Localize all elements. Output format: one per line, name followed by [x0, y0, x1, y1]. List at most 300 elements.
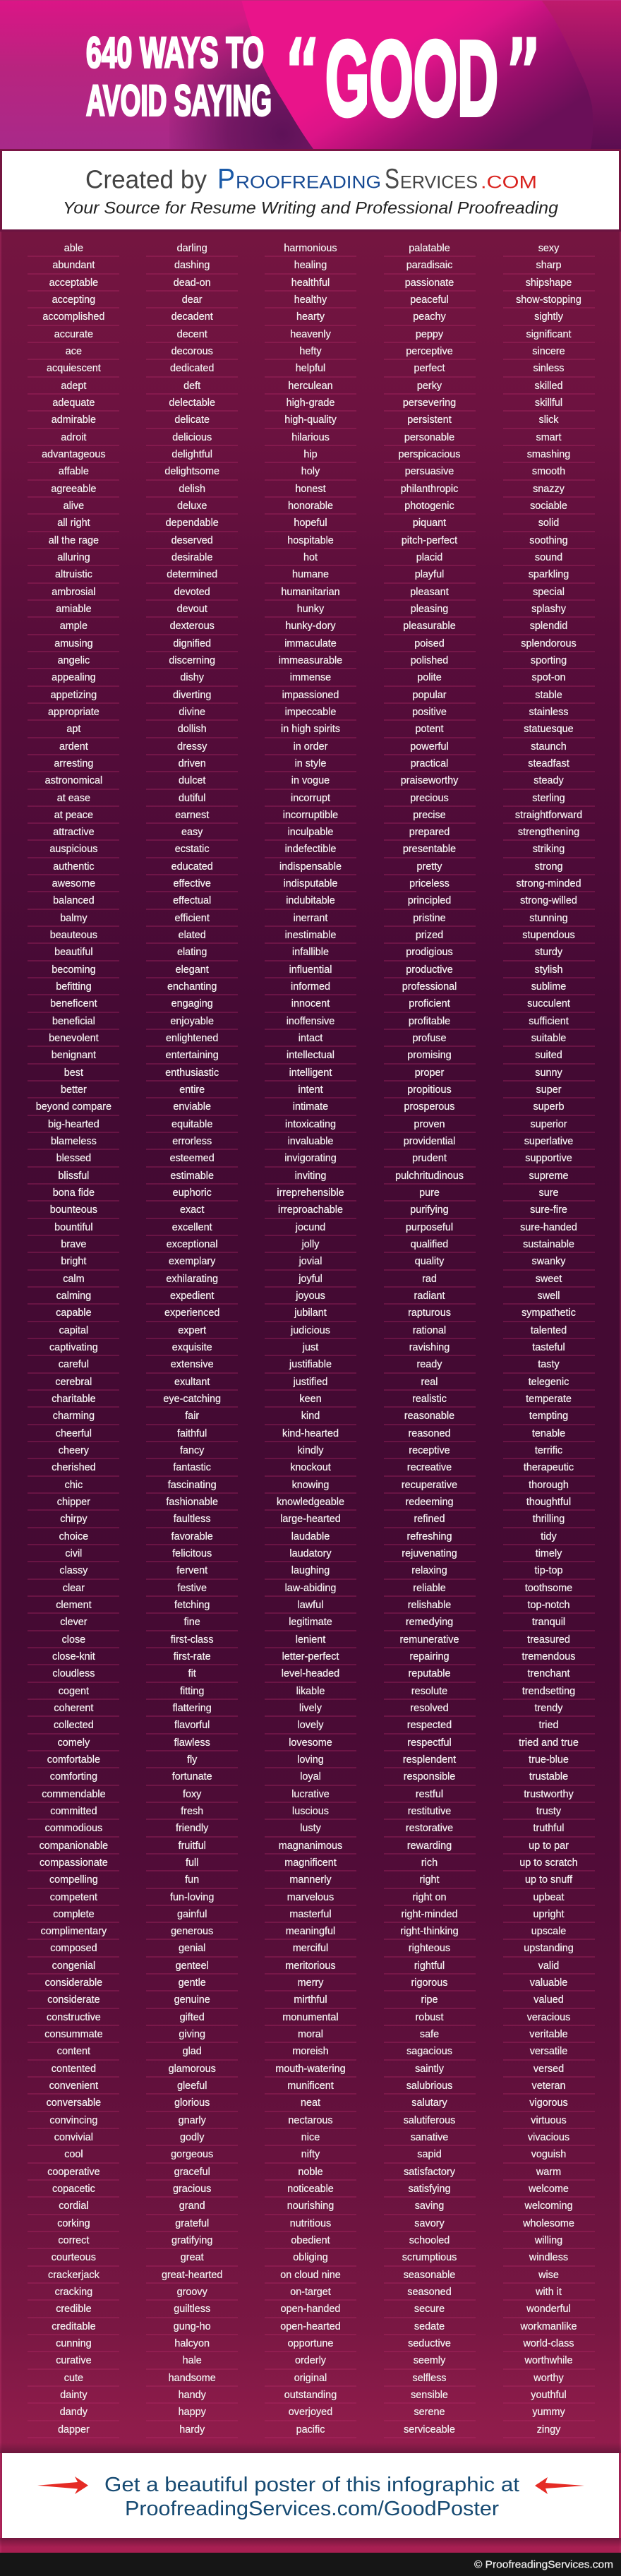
word column 3: lovesome [289, 1737, 332, 1749]
word column 1: complimentary [41, 1926, 107, 1937]
word column 5: stylish [535, 964, 562, 976]
word column 4: restorative [406, 1823, 453, 1834]
word column 5: trenchant [527, 1668, 570, 1679]
word column 4: polished [411, 655, 448, 666]
word column 4: proficient [409, 998, 450, 1010]
word column 3: lusty [300, 1823, 321, 1834]
word column 3: jolly [302, 1239, 319, 1250]
word column 5: workmanlike [521, 2321, 577, 2332]
word column 1: angelic [58, 655, 90, 666]
word column 2: fresh [181, 1806, 203, 1817]
word column 2: devoted [174, 587, 210, 598]
word column 5: toothsome [525, 1583, 572, 1594]
word column 3: moreish [292, 2046, 329, 2057]
word column 5: thoughtful [526, 1497, 571, 1508]
word column 3: inoffensive [287, 1016, 334, 1027]
word column 5: suited [535, 1050, 562, 1061]
word column 3: immaculate [284, 638, 337, 649]
word column 5: smart [536, 432, 561, 443]
word column 3: intact [299, 1033, 322, 1044]
word column 4: rational [413, 1325, 446, 1336]
word column 5: windless [529, 2252, 568, 2263]
word column 5: sure-fire [530, 1204, 567, 1216]
word column 5: staunch [531, 741, 567, 753]
word column 2: dignified [173, 638, 211, 649]
word column 1: bountiful [54, 1222, 93, 1233]
word column 1: alive [64, 501, 84, 512]
word column 5: trusty [536, 1806, 561, 1817]
word column 4: prudent [412, 1153, 447, 1164]
word column 5: superb [533, 1101, 565, 1113]
word column 5: up to scratch [519, 1857, 578, 1869]
created by logo line: ERVICES [400, 173, 478, 193]
word column 1: considerable [45, 1977, 102, 1989]
word column 3: noticeable [287, 2183, 334, 2195]
word column 5: veracious [527, 2012, 570, 2023]
word column 1: big-hearted [48, 1119, 100, 1130]
word column 5: soothing [529, 535, 568, 546]
word column 5: virtuous [531, 2115, 567, 2126]
word column 1: contented [52, 2063, 96, 2075]
word column 2: exact [180, 1204, 204, 1216]
word column 4: satisfying [408, 2183, 450, 2195]
word column 5: telegenic [529, 1377, 569, 1388]
word column 4: poised [414, 638, 445, 649]
word column 1: close-knit [52, 1651, 95, 1663]
word column 4: savory [414, 2218, 445, 2229]
word column 2: dulcet [179, 775, 205, 786]
word column 2: flattering [173, 1703, 212, 1714]
word column 4: safe [420, 2029, 439, 2040]
word column 5: yummy [532, 2407, 565, 2418]
word column 3: meaningful [286, 1926, 335, 1937]
word column 1: cute [64, 2373, 83, 2384]
word column 1: adroit [61, 432, 86, 443]
word column 3: invigorating [284, 1153, 337, 1164]
word column 1: affable [59, 466, 89, 477]
word column 3: immense [290, 672, 331, 683]
word column 2: gainful [177, 1909, 207, 1920]
word column 3: intelligent [289, 1067, 332, 1079]
word column 3: informed [291, 981, 330, 993]
word column 1: commendable [42, 1789, 106, 1800]
word column 5: world-class [524, 2338, 574, 2349]
word column 1: clever [60, 1617, 88, 1628]
word column 3: humanitarian [281, 587, 340, 598]
created by logo line: .COM [481, 173, 537, 193]
word column 4: right-thinking [400, 1926, 459, 1937]
word column 5: valuable [530, 1977, 567, 1989]
copyright: © ProofreadingServices.com [474, 2560, 613, 2571]
word column 4: pristine [413, 913, 446, 924]
word column 2: glad [183, 2046, 202, 2057]
word column 1: cunning [56, 2338, 92, 2349]
word column 3: inestimable [285, 930, 336, 941]
word column 5: sinless [533, 363, 565, 374]
word column 1: commodious [45, 1823, 102, 1834]
title: 640 ways to avoid saying [86, 28, 272, 124]
word column 1: comforting [50, 1771, 97, 1783]
word column 3: herculean [288, 381, 333, 392]
word column 3: law-abiding [285, 1583, 336, 1594]
word column 1: agreeable [51, 484, 96, 495]
word column 1: cooperative [47, 2167, 100, 2178]
word column 5: sterling [532, 792, 565, 803]
word column 4: pleasurable [403, 621, 456, 632]
word column 2: fly [187, 1754, 197, 1766]
word column 5: skilled [535, 381, 563, 392]
word column 1 [28, 243, 119, 2438]
word column 3: large-hearted [280, 1514, 341, 1525]
word column 1: at peace [54, 810, 93, 821]
word column 5: supportive [525, 1153, 572, 1164]
word column 2: engaging [171, 998, 213, 1010]
word column 4: recreative [407, 1462, 452, 1473]
word column 5: upscale [531, 1926, 566, 1937]
word column 1: auspicious [49, 844, 97, 855]
word column 3: likable [296, 1686, 325, 1697]
word column 3: obliging [293, 2252, 328, 2263]
word column 1: courteous [52, 2252, 96, 2263]
word column 5: superlative [524, 1136, 573, 1147]
word column 1: composed [50, 1943, 97, 1954]
word column 5: versed [533, 2063, 564, 2075]
word column 3: holy [301, 466, 320, 477]
created by logo line: Created by [85, 165, 207, 194]
word column 4: perceptive [406, 346, 453, 357]
word column 1: careful [59, 1359, 89, 1370]
word column 3: judicious [291, 1325, 330, 1336]
icon: left red arrow [37, 2476, 88, 2494]
word column 5: timely [536, 1548, 562, 1559]
word column 1: calm [63, 1274, 85, 1285]
word column 4: personable [404, 432, 454, 443]
word column 4: purposeful [406, 1222, 453, 1233]
word column 3: incorruptible [283, 810, 338, 821]
word column 4: salubrious [406, 2080, 452, 2092]
word column 2: diverting [173, 690, 211, 701]
word column 1: cracking [55, 2287, 92, 2298]
word column 1: becoming [52, 964, 96, 976]
word column 2: dashing [174, 260, 210, 271]
word column 3: original [294, 2373, 327, 2384]
word column 2: deserved [171, 535, 213, 546]
title: good in quotes: ” [505, 18, 542, 126]
word column 2: decorous [171, 346, 213, 357]
word column 1: corking [57, 2218, 90, 2229]
word column 1: appropriate [48, 707, 100, 718]
word column 4: productive [406, 964, 453, 976]
word column 5: up to par [529, 1840, 569, 1852]
word column 1: balanced [53, 895, 95, 906]
word column 3: jocund [296, 1222, 325, 1233]
word column 3: hefty [299, 346, 322, 357]
word column 1: beyond compare [36, 1101, 111, 1113]
word column 5: stupendous [522, 930, 575, 941]
word column 2: grand [179, 2200, 205, 2212]
word column 2: gifted [180, 2012, 205, 2023]
word column 2: expert [178, 1325, 206, 1336]
word column 5: sporting [531, 655, 567, 666]
word column 5: sharp [536, 260, 562, 271]
word column 5: supreme [529, 1170, 569, 1182]
word column 5: sympathetic [521, 1307, 576, 1319]
word column 2: enthusiastic [165, 1067, 219, 1079]
word column 4: quality [415, 1256, 444, 1267]
word column 3: lovely [298, 1720, 323, 1731]
word column 2: deluxe [177, 501, 207, 512]
word column 4: refreshing [406, 1531, 452, 1542]
word column 3: level-headed [282, 1668, 339, 1679]
word column 1: accomplished [42, 311, 104, 323]
word column 5: steadfast [528, 758, 569, 769]
word column 5: significant [526, 329, 572, 340]
word column 1: cloudless [52, 1668, 95, 1679]
word column 4: sapid [417, 2149, 442, 2160]
word column 3: inculpable [288, 827, 333, 838]
word column 1: altruistic [55, 569, 92, 580]
word column 1: ace [66, 346, 82, 357]
word column 1: abundant [52, 260, 95, 271]
word column 4: ripe [421, 1994, 438, 2006]
word column 5: tremendous [522, 1651, 576, 1663]
word column 2: ecstatic [175, 844, 210, 855]
word column 2: great [181, 2252, 204, 2263]
word column 2: happy [179, 2407, 206, 2418]
word column 2: decent [177, 329, 207, 340]
word column 2: exultant [174, 1377, 210, 1388]
word column 2: enjoyable [170, 1016, 214, 1027]
word column 5: welcoming [525, 2200, 572, 2212]
title: 640 ways to avoid saying: 640 WAYS TO [86, 28, 264, 76]
word column 5: upstanding [524, 1943, 574, 1954]
word column 3: munificent [287, 2080, 334, 2092]
word column 1: captivating [49, 1342, 98, 1353]
word column 4: reputable [408, 1668, 450, 1679]
word column 4 [384, 243, 476, 2438]
word column 1: capable [56, 1307, 92, 1319]
word column 3: jovial [299, 1256, 322, 1267]
word column 3: kind-hearted [282, 1428, 339, 1439]
word column 5: tempting [529, 1410, 568, 1422]
word column 4: receptive [409, 1445, 450, 1456]
word column 2: fascinating [168, 1480, 217, 1491]
word column 3: healthful [291, 277, 330, 289]
word column 3: harmonious [284, 243, 337, 254]
word column 3: orderly [295, 2355, 326, 2366]
word column 2: dead-on [174, 277, 211, 289]
word column 5: sweet [536, 1274, 562, 1285]
word column 4: remunerative [399, 1634, 459, 1646]
word column 5: talented [531, 1325, 567, 1336]
word column 2: estimable [170, 1170, 214, 1182]
word column 1: chic [65, 1480, 83, 1491]
word column 2: grateful [175, 2218, 209, 2229]
word column 2: euphoric [173, 1187, 212, 1199]
icon: right red arrow [535, 2477, 584, 2494]
word column 1: credible [56, 2304, 92, 2315]
word column 2: esteemed [170, 1153, 215, 1164]
word column 2: groovy [177, 2287, 207, 2298]
word column 3: inviting [295, 1170, 326, 1182]
word column 2: fruitful [179, 1840, 206, 1852]
word column 3: meritorious [285, 1960, 336, 1972]
word column 5: sunny [535, 1067, 562, 1079]
word column 5: valued [533, 1994, 564, 2006]
word column 3: heavenly [290, 329, 331, 340]
word column 3: magnanimous [279, 1840, 342, 1852]
word column 3: just [303, 1342, 318, 1353]
word column 3: outstanding [284, 2390, 337, 2401]
word column 4: proven [414, 1119, 445, 1130]
word column 1: acceptable [49, 277, 98, 289]
word column 5: steady [533, 775, 564, 786]
word column 1: considerate [47, 1994, 100, 2006]
word column 1: constructive [47, 2012, 101, 2023]
word column 5: trustable [529, 1771, 568, 1783]
word column 3: merciful [293, 1943, 328, 1954]
word column 5: splashy [531, 604, 566, 615]
word column 5: statuesque [524, 724, 574, 735]
word column 5: skillful [535, 397, 562, 409]
created by logo line: P [217, 164, 235, 195]
word column 3: hearty [296, 311, 325, 323]
word column 2: exemplary [169, 1256, 215, 1267]
word column 1: compassionate [40, 1857, 108, 1869]
word column 5: straightforward [515, 810, 582, 821]
word column 2: faultless [174, 1514, 211, 1525]
word column 4: prosperous [404, 1101, 454, 1113]
word column 3: intoxicating [285, 1119, 336, 1130]
word column 1: bounteous [50, 1204, 97, 1216]
word column 1: ambrosial [52, 587, 96, 598]
word column 2: elating [177, 947, 207, 958]
word column 5: smashing [527, 449, 570, 460]
word column 1: all right [57, 517, 90, 529]
word column 3: mirthful [294, 1994, 327, 2006]
word column 3: irreprehensible [277, 1187, 344, 1199]
word column 1: close [62, 1634, 85, 1646]
word column 4: pitch-perfect [402, 535, 457, 546]
word column 4: profuse [412, 1033, 446, 1044]
word column 5: show-stopping [516, 294, 581, 306]
word column 3: infallible [292, 947, 329, 958]
word column 5: swell [538, 1290, 560, 1302]
word column 2: eye-catching [163, 1394, 221, 1405]
word column 4: realistic [412, 1394, 447, 1405]
word column 2: discerning [169, 655, 215, 666]
word column 4: persevering [403, 397, 456, 409]
word column 2: fashionable [166, 1497, 218, 1508]
word column 1: competent [50, 1892, 97, 1903]
word column 2: dependable [166, 517, 219, 529]
word column 2: fun-loving [170, 1892, 214, 1903]
word column 4: sedate [414, 2321, 445, 2332]
word column 4: scrumptious [402, 2252, 457, 2263]
word column 2: first-class [171, 1634, 214, 1646]
word column 5: special [533, 587, 565, 598]
word column 3: opportune [288, 2338, 333, 2349]
word column 5: sparkling [529, 569, 569, 580]
word column 5: slick [539, 414, 558, 426]
word column 4: peachy [413, 311, 446, 323]
word column 4: photogenic [404, 501, 454, 512]
word column 4: seemly [414, 2355, 445, 2366]
word column 1: blessed [56, 1153, 91, 1164]
word column 3: intellectual [287, 1050, 334, 1061]
title: good in quotes [284, 18, 542, 138]
word column 3: innocent [291, 998, 330, 1010]
word column 2: dedicated [170, 363, 214, 374]
word column 3: neat [301, 2097, 320, 2109]
word column 2: entire [179, 1084, 205, 1096]
word column 3: knowledgeable [277, 1497, 344, 1508]
word column 3: in high spirits [281, 724, 340, 735]
word column 3: open-hearted [280, 2321, 341, 2332]
word column 2: glamorous [169, 2063, 216, 2075]
word column 5: splendorous [521, 638, 577, 649]
title: 640 ways to avoid saying: AVOID SAYING [86, 76, 272, 124]
word column 3: nice [301, 2132, 320, 2143]
word column 1: benevolent [49, 1033, 99, 1044]
word column 3: on cloud nine [280, 2270, 341, 2281]
word column 3: joyful [299, 1274, 322, 1285]
word column 2: gracious [173, 2183, 211, 2195]
word column 3: hospitable [287, 535, 334, 546]
word column 3: nifty [301, 2149, 320, 2160]
word column 4: sagacious [406, 2046, 452, 2057]
word column 3: immeasurable [279, 655, 342, 666]
word column 3: keen [299, 1394, 322, 1405]
word column 3: moral [298, 2029, 323, 2040]
word column 2: elated [179, 930, 206, 941]
word column 5: sublime [531, 981, 566, 993]
word column 3: jubilant [294, 1307, 327, 1319]
word column 1: amusing [54, 638, 93, 649]
word column 2: fitting [180, 1686, 204, 1697]
word column 3: kindly [298, 1445, 323, 1456]
word column 5: tidy [541, 1531, 557, 1542]
word column 4: restful [416, 1789, 443, 1800]
word column 3: monumental [282, 2012, 339, 2023]
word column 5: trustworthy [524, 1789, 574, 1800]
word column 5: snazzy [533, 484, 565, 495]
word column 1: better [61, 1084, 87, 1096]
poster text: Get a beautiful poster of this infographic at [104, 2474, 519, 2496]
word column 4: principled [408, 895, 451, 906]
word column 3: hot [303, 552, 318, 563]
word column 3: loving [297, 1754, 324, 1766]
word column 1: accepting [52, 294, 95, 306]
word column 4: powerful [410, 741, 449, 753]
word column 2: handsome [169, 2373, 216, 2384]
word column 3: healthy [294, 294, 327, 306]
word column 4: palatable [409, 243, 450, 254]
word column 5: strong [535, 861, 563, 873]
word column 4: perfect [414, 363, 445, 374]
word column 3: laudable [291, 1531, 330, 1542]
word column 3: indispensable [279, 861, 342, 873]
word column 4: positive [412, 707, 447, 718]
word column 3: humane [292, 569, 329, 580]
word column 2: effective [174, 878, 211, 889]
word column 4: practical [411, 758, 448, 769]
word column 3: intent [298, 1084, 323, 1096]
word column 1: accurate [54, 329, 93, 340]
word column 4: respectful [407, 1737, 452, 1749]
word column 5: shipshape [526, 277, 572, 289]
word column 2: entertaining [166, 1050, 219, 1061]
